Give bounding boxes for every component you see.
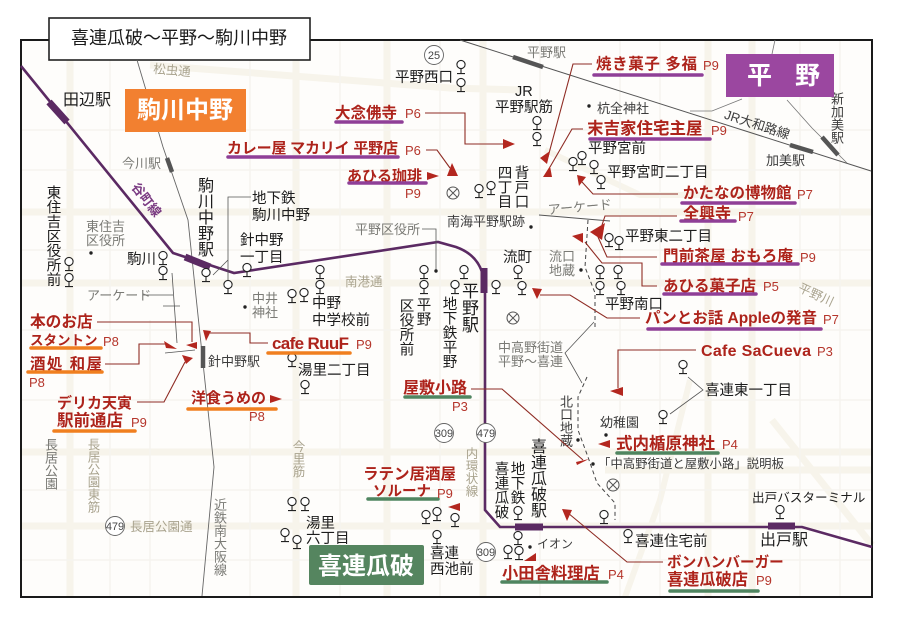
station and place labels: 今川駅	[122, 156, 161, 171]
Tanimachi line	[21, 66, 872, 547]
station and place labels: 地蔵	[549, 263, 575, 278]
station and place labels: 駒川中野	[252, 207, 310, 224]
station and place labels: 北口地蔵	[558, 395, 573, 448]
station and place labels: アーケード	[547, 197, 613, 217]
station and place labels: 流町	[503, 249, 532, 266]
spot: ボンハンバーガー 喜連瓜破店: ボンハンバーガー	[667, 554, 784, 571]
spot: 門前茶屋 おもろ庵	[590, 228, 816, 265]
station and place labels: 中野	[312, 295, 341, 312]
station and place labels: 出戸駅	[760, 531, 808, 549]
station and place labels: 喜連瓜破駅	[528, 438, 547, 518]
spot: デリカ天寅 駅前通店: P9	[131, 415, 147, 430]
route numbers: 309	[477, 547, 495, 559]
spot: 式内楯原神社: 式内楯原神社	[616, 434, 716, 453]
spot: 全興寺: P7	[738, 209, 754, 224]
station and place labels: 長居公園	[43, 438, 58, 490]
spot: ボンハンバーガー 喜連瓜破店: P9	[756, 573, 772, 588]
station and place labels: 平野	[414, 297, 431, 326]
station and place labels: 平野宮前	[588, 140, 646, 157]
spot: 本のお店 スタントン	[30, 313, 197, 349]
spot: 門前茶屋 おもろ庵: 門前茶屋 おもろ庵	[663, 246, 793, 265]
station and place labels: 喜連瓜破	[492, 461, 509, 519]
route numbers: 309	[435, 428, 453, 440]
station and place labels: 東住吉区役所前	[44, 185, 61, 288]
spot: 小田舎料理店: 小田舎料理店	[502, 565, 600, 583]
crossing symbols and dots	[89, 104, 619, 549]
spot: デリカ天寅 駅前通店: 駅前通店	[57, 411, 123, 430]
station and place labels: 六丁目	[306, 530, 350, 547]
spot: ラテン居酒屋 ソルーナ	[363, 465, 460, 511]
spot: ボンハンバーガー 喜連瓜破店	[562, 509, 784, 591]
spot: Cafe SaCueva: P3	[817, 344, 833, 359]
station and place labels: 平野～喜連	[498, 354, 563, 369]
spot: 焼き菓子 多福	[540, 55, 719, 164]
spot: あひる珈琲	[347, 168, 439, 201]
spot: 洋食うめの: P8	[249, 409, 265, 424]
spot: あひる菓子店	[572, 233, 779, 295]
station and place labels: 四丁目	[496, 165, 512, 209]
station and place labels: 平野西口	[395, 69, 453, 86]
station and place labels: 平野宮町二丁目	[607, 164, 708, 181]
station and place labels: 針中野駅	[208, 354, 260, 369]
station and place labels: 西池前	[430, 561, 474, 578]
station and place labels: 中学校前	[312, 312, 370, 329]
title box	[49, 18, 310, 60]
route number circles	[106, 46, 496, 562]
spot: 大念佛寺	[335, 104, 515, 149]
station and place labels: 平野区役所	[355, 222, 420, 237]
station and place labels: 松虫通	[153, 62, 192, 79]
spot: カレー屋 マカリイ 平野店: P6	[405, 143, 421, 158]
spot: かたなの博物館: かたなの博物館	[683, 184, 792, 202]
spot: カレー屋 マカリイ 平野店	[227, 140, 458, 176]
station and place labels: 平野東二丁目	[625, 228, 712, 245]
station and place labels: 平野南口	[605, 296, 663, 313]
station and place labels: 谷町線	[128, 180, 164, 220]
station and place labels: 区役所前	[398, 298, 414, 357]
spot: cafe RuuF: P9	[356, 337, 372, 352]
spot: 屋敷小路	[403, 378, 589, 465]
station and place labels: 内環状線	[464, 447, 478, 497]
area label: 喜連瓜破	[309, 545, 424, 585]
spot: あひる菓子店: P5	[763, 279, 779, 294]
spot: パンとお話 Appleの発音: P7	[823, 312, 839, 327]
station and place labels: 地下鉄平野	[440, 296, 457, 369]
area label: 平野	[726, 54, 834, 97]
spot: ラテン居酒屋 ソルーナ: P9	[437, 486, 453, 501]
spot: 小田舎料理店: P4	[608, 567, 624, 582]
station and place labels: 平野駅	[459, 282, 478, 333]
Kintetsu line	[137, 60, 214, 596]
spot: あひる珈琲: P9	[405, 186, 421, 201]
area label: 平野: 平	[747, 62, 772, 90]
spot: 本のお店 スタントン: 本のお店	[30, 313, 93, 331]
station and place labels: 田辺駅	[63, 91, 111, 109]
route numbers: 479	[477, 428, 495, 440]
route numbers: 479	[106, 521, 124, 533]
title box: 喜連瓜破～平野～駒川中野	[71, 28, 287, 48]
station and place labels: 平野川	[796, 281, 836, 309]
station and place labels: 長居公園東筋	[86, 438, 100, 514]
spot: パンとお話 Appleの発音: パンとお話 Appleの発音	[645, 309, 817, 327]
spot: 全興寺: 全興寺	[683, 204, 731, 223]
station and place labels: 中高野街道	[498, 340, 563, 355]
spot: パンとお話 Appleの発音	[532, 288, 839, 329]
station and place labels: 幼稚園	[600, 415, 639, 430]
station and place labels: アーケード	[87, 288, 151, 303]
spot: 本のお店 スタントン: スタントン	[30, 333, 98, 348]
spot: 末吉家住宅主屋: 末吉家住宅主屋	[587, 118, 702, 138]
station and place labels: 中井	[252, 291, 278, 306]
station and place labels	[43, 45, 865, 578]
station and place labels: 針中野	[240, 232, 284, 249]
spot: 本のお店 スタントン: P8	[103, 334, 119, 349]
spot: 大念佛寺: P6	[405, 106, 421, 121]
spot: 末吉家住宅主屋	[543, 118, 727, 177]
station and place labels: 喜連東一丁目	[705, 382, 792, 399]
spot: 全興寺	[590, 204, 754, 237]
spot: あひる菓子店: あひる菓子店	[663, 277, 756, 295]
spot: ラテン居酒屋 ソルーナ: ラテン居酒屋	[363, 465, 456, 483]
spot: Cafe SaCueva	[610, 343, 833, 396]
JR Yamatoji line	[460, 40, 871, 171]
station and place labels: 区役所	[86, 233, 125, 248]
spot: 屋敷小路: 屋敷小路	[403, 378, 467, 397]
station and place labels: 湯里二丁目	[298, 362, 370, 379]
station and place labels: 地下鉄	[508, 461, 525, 505]
station and place labels: 東住吉	[86, 219, 125, 234]
spot: 洋食うめの: 洋食うめの	[191, 389, 266, 407]
spot: 酒処 和屋: P8	[29, 375, 45, 390]
station and place labels: 喜連	[430, 545, 459, 562]
station and place labels: 地下鉄	[252, 190, 296, 207]
station and place labels: 駒川	[127, 251, 156, 268]
station and place labels: 湯里	[306, 515, 335, 532]
station bars	[49, 102, 795, 527]
station and place labels: 出戸バスターミナル	[752, 491, 865, 505]
spot: 酒処 和屋	[28, 341, 177, 390]
station and place labels: 平野駅筋	[495, 99, 553, 116]
station and place labels: イオン	[537, 537, 573, 551]
station and place labels: 一丁目	[240, 250, 284, 266]
spot: cafe RuuF: cafe RuuF	[272, 334, 349, 353]
station and place labels: 新加美駅	[829, 92, 844, 145]
station and place labels: 「中高野街道と屋敷小路」説明板	[598, 456, 784, 471]
route numbers	[106, 50, 495, 559]
station and place labels: 流口	[549, 249, 575, 264]
station and place labels: 駒川中野駅	[195, 177, 214, 257]
spot: かたなの博物館: P7	[797, 187, 813, 202]
station and place labels: 南海平野駅跡	[447, 214, 525, 229]
spot: 屋敷小路: P3	[452, 399, 468, 414]
station and place labels: 今里筋	[290, 439, 305, 478]
station and place labels: 長居公園通	[130, 520, 193, 534]
spot: 末吉家住宅主屋: P9	[711, 123, 727, 138]
area label: 喜連瓜破: 喜連瓜破	[318, 553, 414, 580]
spot: Cafe SaCueva: Cafe SaCueva	[701, 343, 811, 360]
spot: 式内楯原神社	[598, 434, 738, 453]
spot: カレー屋 マカリイ 平野店: カレー屋 マカリイ 平野店	[227, 140, 398, 157]
spot: デリカ天寅 駅前通店: デリカ天寅	[57, 394, 132, 412]
spot: デリカ天寅 駅前通店	[54, 355, 193, 431]
station and place labels: 背戸口	[512, 165, 529, 209]
spot: cafe RuuF	[203, 330, 372, 353]
side lines	[690, 40, 847, 163]
bus stops	[65, 60, 784, 560]
station and place labels: JR	[515, 84, 533, 100]
spot: かたなの博物館	[577, 175, 813, 203]
spot: 洋食うめの	[188, 389, 282, 424]
spot: 門前茶屋 おもろ庵: P9	[800, 250, 816, 265]
station and place labels: 加美駅	[766, 153, 805, 168]
station and place labels: 近鉄南大阪線	[212, 498, 227, 576]
spot: あひる珈琲: あひる珈琲	[347, 168, 422, 185]
spot: 式内楯原神社: P4	[722, 437, 738, 452]
station and place labels: JR大和路線	[723, 107, 792, 142]
spot: 小田舎料理店	[502, 553, 624, 583]
spot: 大念佛寺: 大念佛寺	[335, 104, 397, 122]
route numbers: 25	[428, 50, 440, 62]
arcade and old road lines	[143, 197, 703, 520]
spot: ラテン居酒屋 ソルーナ: ソルーナ	[373, 484, 431, 500]
station and place labels: 杭全神社	[597, 101, 649, 116]
spot: 焼き菓子 多福: 焼き菓子 多福	[596, 55, 697, 73]
station and place labels: 南港通	[345, 274, 383, 289]
area label: 駒川中野	[125, 89, 246, 132]
area label: 平野: 野	[795, 62, 820, 90]
area label: 駒川中野: 駒川中野	[137, 97, 233, 124]
station and place labels: 平野駅	[527, 45, 566, 60]
station and place labels: 神社	[252, 305, 278, 320]
spot: 酒処 和屋: 酒処 和屋	[30, 355, 102, 373]
spot: ボンハンバーガー 喜連瓜破店: 喜連瓜破店	[667, 570, 748, 589]
spot: 焼き菓子 多福: P9	[703, 58, 719, 73]
station and place labels: 喜連住宅前	[635, 533, 708, 550]
